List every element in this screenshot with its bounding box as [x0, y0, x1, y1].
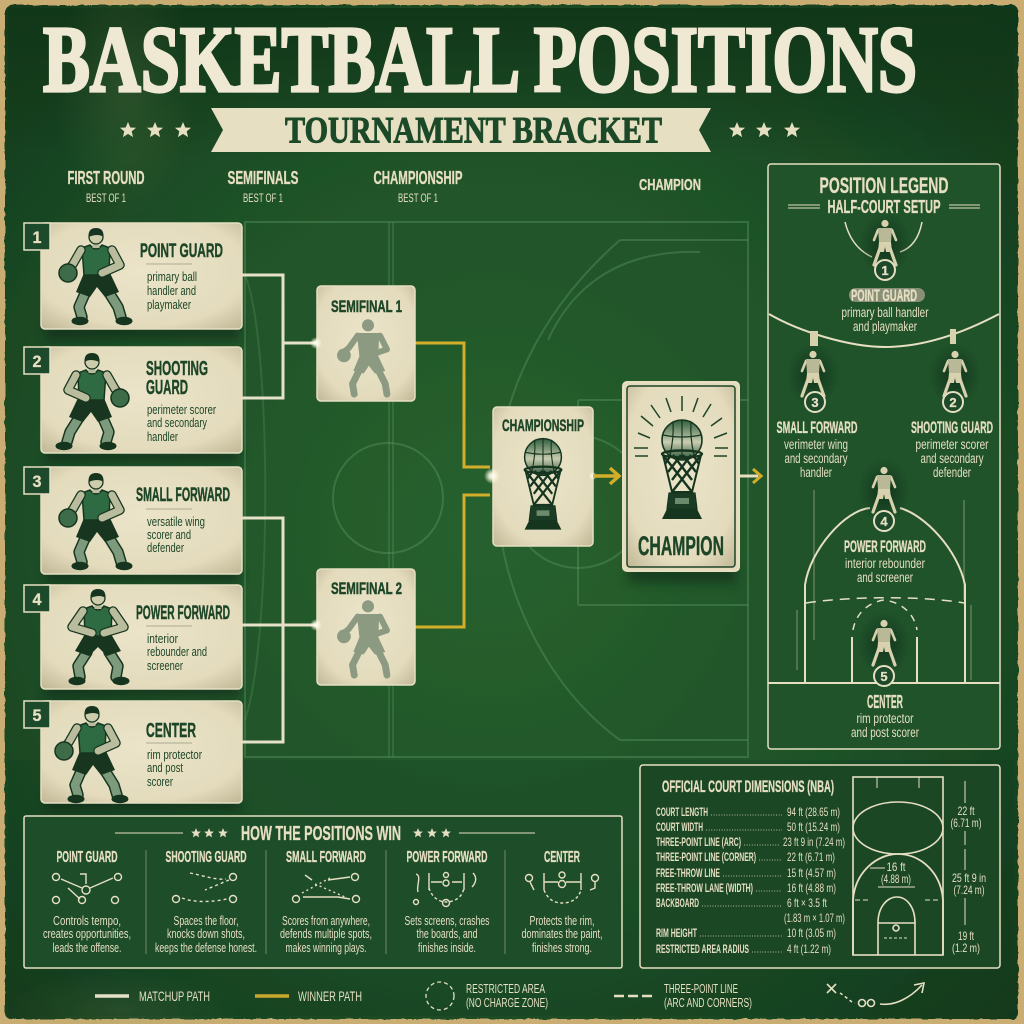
dimension rows: COURT WIDTH	[656, 820, 703, 834]
column dividers	[146, 850, 505, 954]
dimension rows: 15 ft (4.57 m)	[787, 866, 836, 880]
how: center: Protects the rim,	[530, 914, 594, 928]
legend: center: and post scorer	[851, 725, 919, 740]
card: power forward: POWER FORWARD	[136, 603, 230, 624]
how: point guard: Controls tempo,	[53, 914, 121, 928]
dimension rows: COURT LENGTH	[656, 805, 708, 819]
how: point guard: leads the offense.	[52, 941, 122, 955]
legend heading	[788, 173, 980, 217]
icon: play diagram	[827, 983, 924, 1006]
card: center: 5	[32, 706, 42, 725]
how heading: HOW THE POSITIONS WIN	[241, 823, 401, 845]
dimension rows: 10 ft (3.05 m)	[787, 926, 836, 940]
legend: small forward: handler	[800, 465, 832, 480]
court diagram	[853, 777, 943, 955]
card: shooting guard: handler	[147, 429, 178, 444]
diagram labels: 16 ft	[886, 860, 906, 874]
how: small forward	[280, 849, 372, 955]
card: small forward	[24, 467, 242, 574]
subtitle banner: TOURNAMENT BRACKET	[285, 110, 662, 152]
stars right	[729, 122, 800, 137]
dimension rows: 16 ft (4.88 m)	[787, 881, 836, 895]
card: point guard: playmaker	[147, 297, 191, 312]
championship card: CHAMPIONSHIP	[502, 416, 584, 435]
legend: power forward: and screener	[857, 570, 913, 585]
how: point guard: POINT GUARD	[56, 849, 118, 866]
legend: point guard: primary ball handler	[842, 305, 929, 320]
matchup connectors	[242, 275, 316, 742]
card: point guard: primary ball	[147, 269, 197, 284]
legend: three-point line: (ARC AND CORNERS)	[664, 995, 752, 1010]
card: small forward: versatile wing	[147, 514, 205, 529]
legend: matchup path	[95, 988, 210, 1004]
panel: official court dimensions: OFFICIAL COURT DIMENSIONS (NBA)	[662, 777, 834, 796]
dimension rows: RESTRICTED AREA RADIUS	[656, 942, 749, 956]
diagram labels: (4.88 m)	[881, 872, 911, 886]
legend: power forward	[844, 459, 926, 585]
card: power forward	[24, 585, 242, 689]
card: shooting guard	[24, 347, 242, 453]
legend: matchup path: MATCHUP PATH	[139, 988, 210, 1004]
legend: point guard	[842, 212, 929, 334]
legend: three-point line: THREE-POINT LINE	[664, 981, 738, 996]
how: small forward: defends multiple spots,	[280, 927, 372, 941]
how: shooting guard: knocks down shots,	[167, 927, 245, 941]
legend: small forward	[776, 331, 858, 480]
how: center: CENTER	[544, 849, 580, 866]
legend: center	[851, 612, 919, 740]
semifinal 2	[317, 569, 415, 685]
panel: official court dimensions	[640, 765, 1000, 968]
legend: center: rim protector	[856, 711, 914, 726]
round headers	[68, 168, 701, 205]
legend: shooting guard: and secondary	[920, 451, 984, 466]
legend heading: HALF-COURT SETUP	[828, 197, 940, 217]
card: small forward: scorer and	[147, 527, 191, 542]
legend: power forward: interior rebounder	[845, 556, 925, 571]
legend: small forward: 3	[811, 395, 819, 410]
how: shooting guard: keeps the defense honest.	[155, 941, 257, 955]
legend: small forward: SMALL FORWARD	[776, 419, 858, 437]
legend: center: 5	[880, 669, 888, 684]
card: power forward: rebounder and	[147, 644, 207, 659]
legend: winner path	[255, 988, 362, 1004]
how: small forward: Scores from anywhere,	[282, 914, 370, 928]
dimension rows: BACKBOARD	[656, 896, 699, 910]
card: small forward: defender	[147, 540, 184, 555]
card: power forward: screener	[147, 658, 183, 673]
how: center: dominates the paint,	[522, 927, 602, 941]
legend: shooting guard: 2	[949, 395, 957, 410]
card: shooting guard: 2	[32, 352, 42, 371]
legend: shooting guard: perimeter scorer	[916, 437, 989, 452]
legend: shooting guard	[911, 329, 993, 480]
card shadows	[45, 322, 736, 811]
semifinal 2: SEMIFINAL 2	[331, 580, 402, 598]
card: shooting guard: and secondary	[147, 415, 207, 430]
dimension rows: RIM HEIGHT	[656, 926, 697, 940]
round headers: BEST OF 1	[86, 193, 126, 205]
semifinal 1	[317, 286, 415, 401]
card: small forward: 3	[32, 472, 42, 491]
card: power forward: 4	[32, 590, 42, 609]
arrow to champion	[593, 468, 619, 484]
stars left	[120, 122, 191, 137]
dimension rows: THREE-POINT LINE (CORNER)	[656, 850, 756, 864]
how: center	[522, 849, 602, 955]
card: point guard: 1	[32, 228, 42, 247]
how: point guard	[43, 849, 131, 955]
card: center: CENTER	[146, 720, 196, 742]
diagram labels: (1.2 m)	[952, 941, 980, 955]
dimension rows	[656, 805, 845, 956]
legend heading: POSITION LEGEND	[820, 173, 948, 198]
dimension rows: 6 ft × 3.5 ft	[787, 896, 827, 910]
champion card: CHAMPION	[638, 531, 724, 561]
championship card	[493, 407, 593, 546]
card: shooting guard: perimeter scorer	[147, 402, 216, 417]
legend: small forward: and secondary	[784, 451, 848, 466]
legend: point guard: and playmaker	[853, 319, 917, 334]
diagram labels: (7.24 m)	[954, 883, 984, 897]
round headers: FIRST ROUND	[68, 168, 144, 188]
diagram labels: 25 ft 9 in	[952, 871, 986, 885]
court lines background	[245, 222, 748, 757]
legend: point guard: POINT GUARD	[851, 287, 917, 305]
card: center	[24, 701, 242, 803]
panel: position legend	[768, 164, 1000, 749]
round headers: BEST OF 1	[243, 193, 283, 205]
how heading	[115, 823, 535, 845]
how: small forward: SMALL FORWARD	[286, 849, 366, 866]
round headers: SEMIFINALS	[228, 168, 298, 188]
legend: power forward: 4	[880, 514, 888, 529]
winner connectors	[415, 343, 490, 627]
legend: center: CENTER	[867, 692, 903, 712]
champion card	[623, 382, 739, 571]
card: center: scorer	[147, 774, 173, 789]
diagram labels: 22 ft	[958, 804, 975, 818]
connector junction glows	[310, 337, 597, 631]
arrow out of champion	[739, 469, 761, 483]
card: center: rim protector	[147, 747, 202, 762]
card: point guard: handler and	[147, 283, 196, 298]
how: shooting guard: SHOOTING GUARD	[166, 849, 246, 866]
card: shooting guard: GUARD	[146, 377, 188, 399]
round headers: CHAMPIONSHIP	[374, 168, 462, 188]
how: small forward: makes winning plays.	[286, 941, 366, 955]
dimension rows: 94 ft (28.65 m)	[787, 805, 840, 819]
legend: restricted area: (NO CHARGE ZONE)	[466, 995, 548, 1010]
dimension rows: FREE-THROW LANE (WIDTH)	[656, 881, 753, 895]
how: shooting guard	[155, 849, 257, 955]
dimension rows: 4 ft (1.22 m)	[787, 942, 831, 956]
legend court lines	[768, 222, 1000, 683]
legend: point guard: 1	[881, 263, 889, 278]
legend: power forward: POWER FORWARD	[844, 538, 926, 556]
diagram labels: 19 ft	[958, 929, 974, 943]
how: power forward	[404, 849, 490, 955]
how: power forward: Sets screens, crashes	[404, 914, 490, 928]
card: shooting guard: SHOOTING	[146, 358, 208, 380]
panel: how the positions win	[24, 816, 622, 968]
legend: three-point line	[614, 981, 752, 1010]
legend: restricted area: RESTRICTED AREA	[466, 981, 545, 996]
how: shooting guard: Spaces the floor,	[174, 914, 238, 928]
legend: winner path: WINNER PATH	[298, 988, 362, 1004]
how: power forward: POWER FORWARD	[406, 849, 488, 866]
diagram labels	[881, 781, 986, 955]
dimension leader dots	[700, 815, 782, 952]
card: point guard	[24, 223, 242, 329]
card: center: and post	[147, 760, 183, 775]
card: power forward: interior	[147, 631, 179, 646]
how: power forward: the boards, and	[416, 927, 478, 941]
dimension rows: THREE-POINT LINE (ARC)	[656, 835, 741, 849]
legend: restricted area	[426, 981, 548, 1010]
round headers: CHAMPION	[639, 177, 701, 194]
round headers: BEST OF 1	[398, 193, 438, 205]
dimension rows: (1.83 m × 1.07 m)	[784, 911, 845, 925]
diagram labels: (6.71 m)	[950, 816, 982, 830]
how: point guard: creates opportunities,	[43, 927, 131, 941]
dimension rows: 23 ft 9 in (7.24 m)	[783, 835, 845, 849]
how: power forward: finishes inside.	[418, 941, 476, 955]
dimension rows: FREE-THROW LINE	[656, 866, 720, 880]
dimension rows: 50 ft (15.24 m)	[787, 820, 840, 834]
legend: shooting guard: defender	[933, 465, 971, 480]
legend: small forward: verimeter wing	[784, 437, 848, 452]
card: small forward: SMALL FORWARD	[136, 485, 230, 506]
card: point guard: POINT GUARD	[140, 240, 223, 262]
semifinal 1: SEMIFINAL 1	[331, 298, 402, 316]
dimension rows: 22 ft (6.71 m)	[787, 850, 835, 864]
how: center: finishes strong.	[532, 941, 592, 955]
